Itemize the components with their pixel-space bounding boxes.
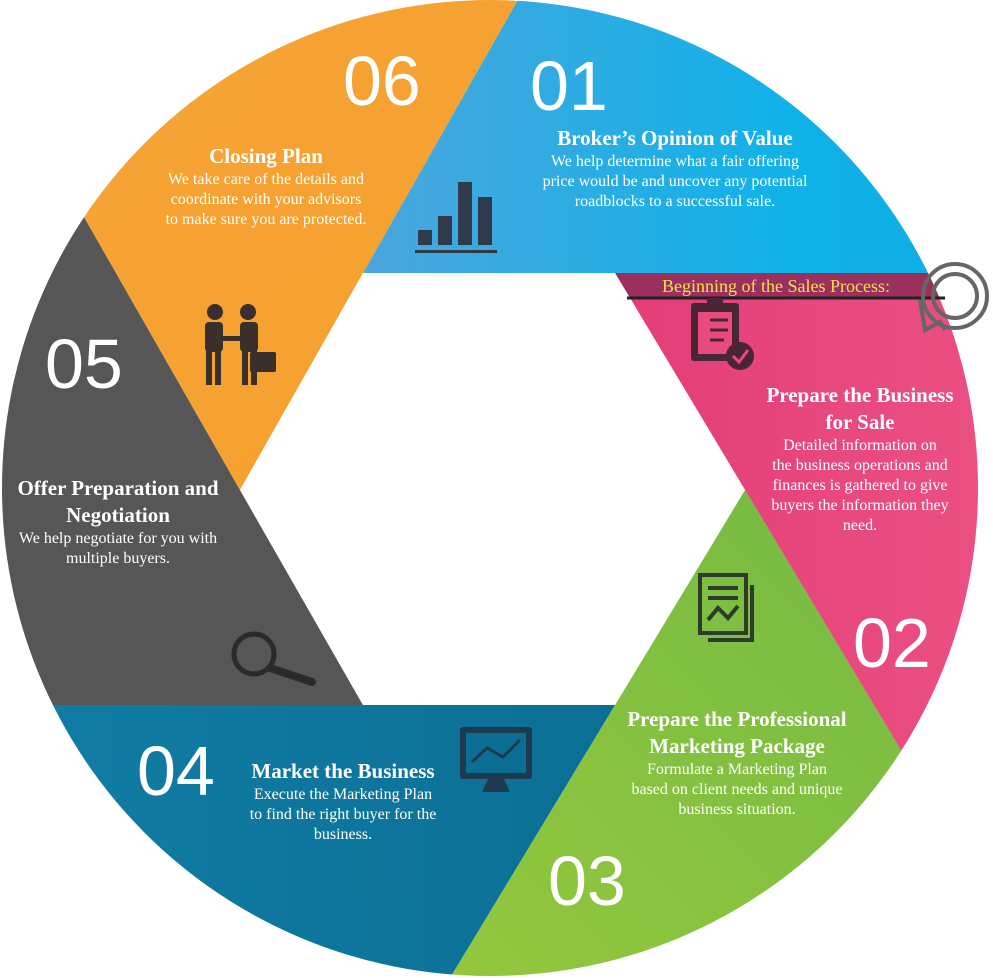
- text: marketing package: business situation.: [678, 801, 796, 818]
- segment: 03 green: [452, 490, 902, 976]
- icon: bar chart: [415, 182, 497, 253]
- text: broker's opinion: Broker’s Opinion of Value: [557, 126, 793, 150]
- number 04: 04: [137, 732, 215, 810]
- band: beginning: [615, 273, 939, 296]
- text: prepare the business: Detailed information on: [783, 437, 937, 454]
- icon: handshake: [205, 304, 276, 385]
- text: marketing package: Prepare the Professional: [627, 707, 847, 731]
- icon: document chart: [700, 575, 752, 640]
- segment: 02 pink: [615, 273, 978, 751]
- text: marketing package: Formulate a Marketing Plan: [647, 761, 827, 778]
- text: closing plan: coordinate with your advisors: [171, 191, 361, 208]
- text: marketing package: [627, 707, 847, 818]
- text: prepare the business: the business operations and: [772, 457, 948, 474]
- text: prepare the business: Prepare the Business: [766, 383, 954, 407]
- number 05: 05: [45, 325, 123, 403]
- segment: 01 blue: [363, 0, 928, 273]
- segment: 05 gray: [2, 217, 363, 705]
- text: prepare the business: buyers the information they: [771, 497, 949, 514]
- text: prepare the business: for Sale: [825, 410, 895, 434]
- icon: clipboard: [691, 298, 754, 370]
- text: offer preparation: Offer Preparation and: [17, 476, 219, 500]
- text: market the business: Execute the Marketing Plan: [254, 786, 432, 803]
- segment: 04 teal: [0, 705, 615, 978]
- icon: magnifier: [234, 634, 312, 682]
- text: market the business: to find the right buyer for the: [250, 806, 436, 823]
- text: prepare the business: finances is gathered to give: [772, 477, 948, 494]
- text: offer preparation: multiple buyers.: [66, 550, 170, 567]
- segment: 06 orange: [84, 0, 518, 490]
- text: marketing package: Marketing Package: [649, 734, 825, 758]
- number 03: 03: [548, 842, 626, 920]
- text: market the business: Market the Business: [251, 759, 435, 783]
- number 02: 02: [853, 604, 931, 682]
- label: beginning of sales process: Beginning of the Sales Process:: [662, 276, 890, 296]
- center hexagon: [240, 273, 745, 705]
- icon: circular arrow: [920, 264, 987, 330]
- text: marketing package: based on client needs and unique: [631, 781, 843, 798]
- text: closing plan: [166, 144, 366, 228]
- text: broker's opinion: We help determine what a fair offering: [551, 153, 799, 170]
- number 06: 06: [343, 42, 421, 120]
- text: market the business: [250, 759, 436, 843]
- text: offer preparation: [17, 476, 219, 567]
- text: offer preparation: We help negotiate for you with: [19, 530, 217, 547]
- text: prepare the business: [766, 383, 954, 534]
- text: broker's opinion: [543, 126, 808, 210]
- text: prepare the business: need.: [843, 517, 877, 534]
- icon: monitor: [460, 727, 532, 792]
- text: market the business: business.: [314, 826, 372, 843]
- text: broker's opinion: roadblocks to a successful sale.: [575, 193, 775, 210]
- text: closing plan: We take care of the details and: [168, 171, 364, 188]
- number 01: 01: [530, 47, 608, 125]
- text: offer preparation: Negotiation: [66, 503, 170, 527]
- text: broker's opinion: price would be and uncover any potential: [543, 173, 808, 190]
- text: closing plan: Closing Plan: [209, 144, 323, 168]
- text: closing plan: to make sure you are protected.: [166, 211, 366, 228]
